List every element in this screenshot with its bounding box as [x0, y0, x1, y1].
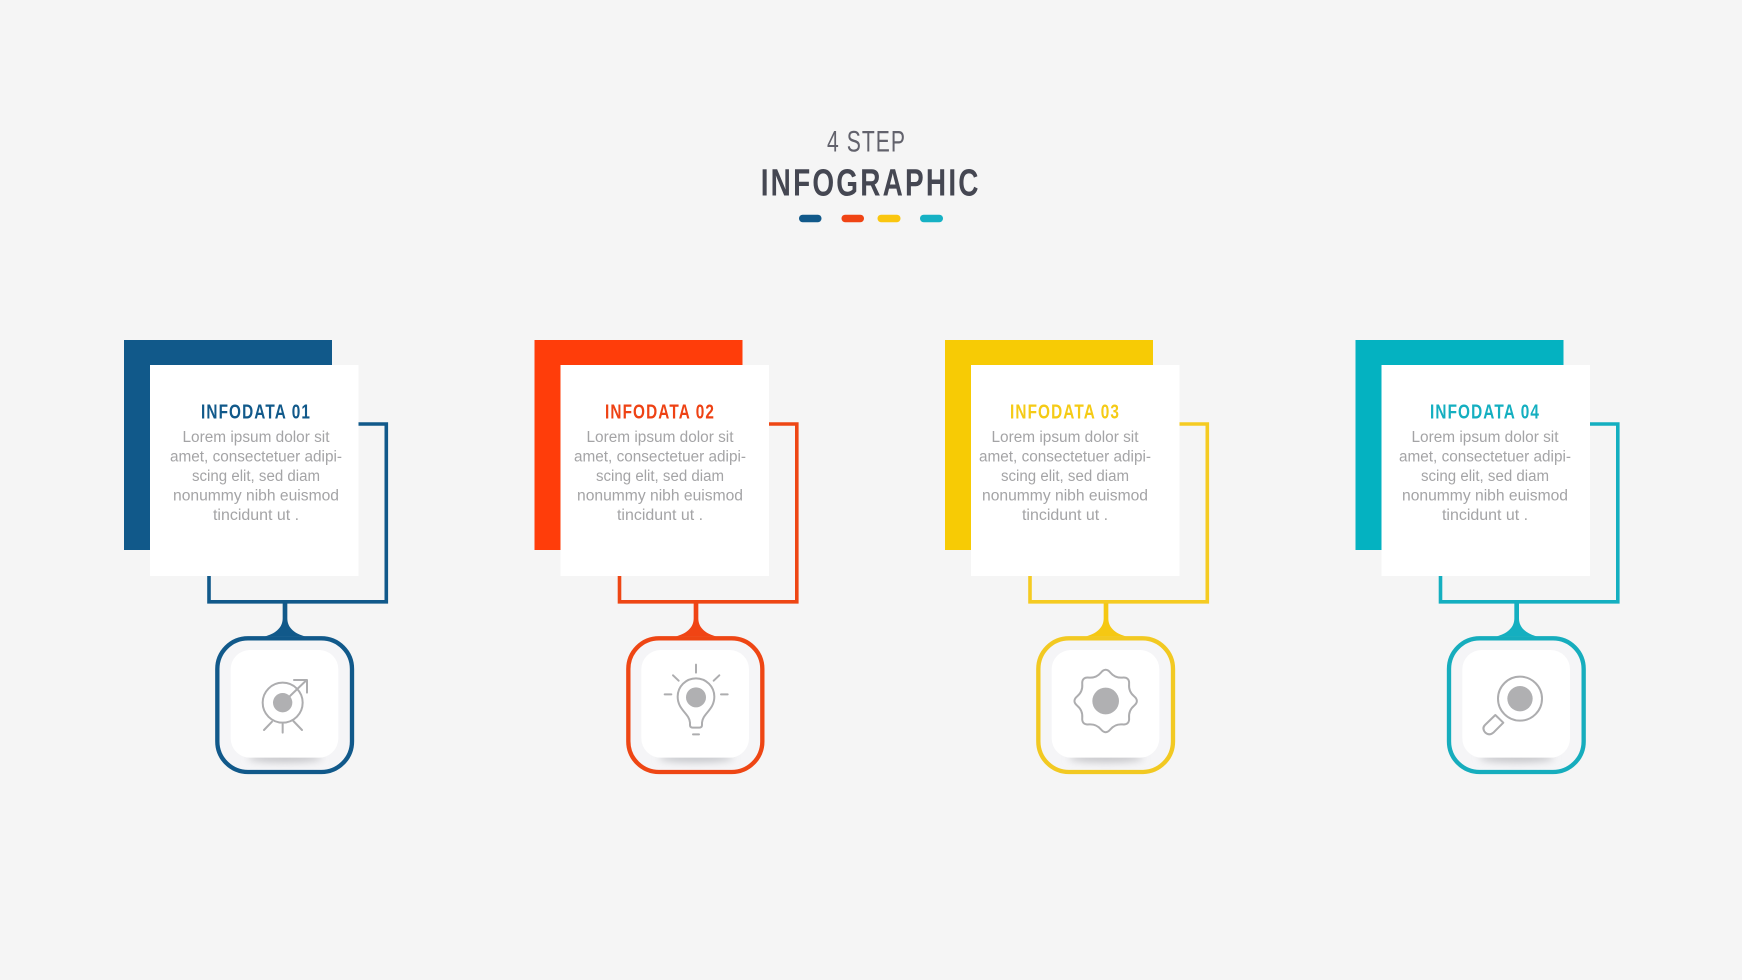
card body text: [170, 429, 342, 524]
card body text: tincidunt ut .: [1022, 507, 1108, 524]
card body text: amet, consectetuer adipi-: [1399, 449, 1571, 466]
card body text: amet, consectetuer adipi-: [979, 449, 1151, 466]
icon badge: [1038, 603, 1173, 772]
heading: INFOGRAPHIC: INFOGRAPHIC: [761, 162, 981, 204]
text card: [560, 365, 769, 576]
card body text: nonummy nibh euismod: [173, 487, 339, 504]
accent square: [1356, 340, 1564, 550]
title: [761, 126, 981, 204]
card body text: amet, consectetuer adipi-: [170, 449, 342, 466]
icon: gear: [1074, 670, 1137, 732]
icon badge: [1449, 603, 1584, 772]
card body text: scing elit, sed diam: [1421, 468, 1549, 485]
card heading: INFODATA 01: [201, 400, 311, 423]
colour legend dashes: [799, 215, 943, 222]
card body text: amet, consectetuer adipi-: [574, 449, 746, 466]
connector outline: [1030, 424, 1207, 602]
accent square: [124, 340, 332, 550]
icon: light bulb: [665, 665, 728, 734]
connector outline: [620, 424, 797, 602]
card body text: Lorem ipsum dolor sit: [586, 429, 734, 446]
card body text: Lorem ipsum dolor sit: [992, 429, 1139, 446]
icon badge: [217, 603, 352, 772]
text card: [1382, 365, 1590, 576]
card body text: tincidunt ut .: [617, 507, 703, 524]
card heading: INFODATA 02: [605, 400, 715, 423]
card body text: nonummy nibh euismod: [982, 487, 1148, 504]
connector outline: [209, 424, 386, 602]
icon: magnifying glass: [1483, 677, 1542, 734]
card body text: tincidunt ut .: [1442, 507, 1528, 524]
panel: infodata 03: [945, 340, 1207, 772]
text card: [971, 365, 1180, 576]
card body text: scing elit, sed diam: [192, 468, 320, 485]
panel: infodata 01: [124, 340, 386, 772]
card body text: [979, 429, 1151, 524]
card heading: INFODATA 04: [1430, 400, 1540, 423]
connector outline: [1440, 424, 1618, 602]
card body text: tincidunt ut .: [213, 507, 299, 524]
card body text: Lorem ipsum dolor sit: [182, 429, 330, 446]
accent square: [534, 340, 742, 550]
card body text: Lorem ipsum dolor sit: [1412, 429, 1559, 446]
card body text: scing elit, sed diam: [596, 468, 724, 485]
panel: infodata 02: [534, 340, 797, 772]
text card: [150, 365, 358, 576]
card body text: scing elit, sed diam: [1001, 468, 1129, 485]
panel: infodata 04: [1356, 340, 1618, 772]
card body text: [1399, 429, 1571, 524]
card heading: INFODATA 03: [1010, 400, 1120, 423]
card body text: nonummy nibh euismod: [577, 487, 743, 504]
subtitle: 4 STEP: 4 STEP: [827, 126, 906, 158]
card body text: [574, 429, 746, 524]
icon: target with arrow: [263, 680, 307, 733]
accent square: [945, 340, 1153, 550]
icon badge: [628, 603, 762, 772]
card body text: nonummy nibh euismod: [1402, 487, 1568, 504]
